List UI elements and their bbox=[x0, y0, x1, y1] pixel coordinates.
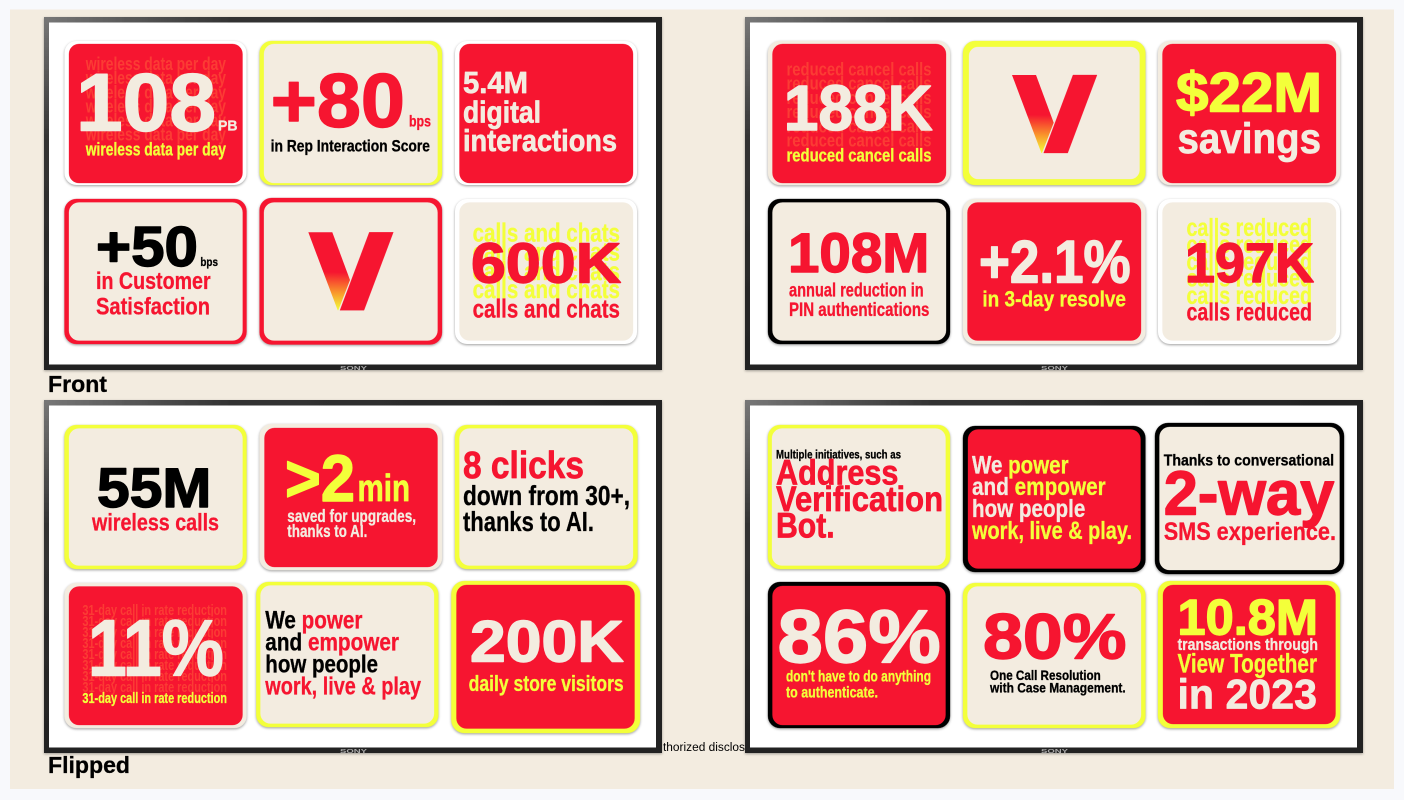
text block: how people bbox=[265, 650, 378, 678]
panel: front, left screen bbox=[44, 17, 662, 372]
card: 600K calls and chats bbox=[455, 199, 637, 344]
card: $22M savings bbox=[1158, 41, 1340, 185]
caption: PIN authentications bbox=[789, 300, 929, 321]
stat: 108M bbox=[788, 221, 929, 284]
card: >2 min saved for upgrades bbox=[260, 424, 442, 570]
stat: +80 bbox=[271, 59, 405, 144]
ghost repeated caption: 31-day call in rate reduction bbox=[82, 680, 227, 696]
caption: daily store visitors bbox=[469, 671, 624, 696]
ghost repeated caption bbox=[82, 603, 227, 696]
caption: to authenticate. bbox=[786, 684, 878, 701]
headline: Bot. bbox=[776, 507, 835, 546]
card: 5.4M digital interactions bbox=[455, 41, 637, 185]
ghost repeated caption: 31-day call in rate reduction bbox=[82, 625, 227, 641]
screen frame: SONY bbox=[1041, 366, 1069, 372]
caption: wireless calls bbox=[91, 510, 219, 537]
ghost repeated caption: wireless data per day bbox=[85, 111, 226, 131]
text block: work, live & play. bbox=[971, 517, 1132, 545]
text block: We power bbox=[972, 451, 1069, 479]
text block: and empower bbox=[972, 473, 1106, 501]
card: +2.1% in 3-day resolve bbox=[963, 199, 1145, 344]
caption bbox=[463, 480, 630, 537]
unit: PB bbox=[218, 118, 238, 135]
text: transactions through: transactions through bbox=[1178, 635, 1318, 654]
stat: 188K bbox=[784, 72, 933, 144]
caption: in 3-day resolve bbox=[982, 287, 1126, 312]
caption bbox=[96, 268, 211, 321]
unit: bps bbox=[409, 114, 431, 131]
ghost repeated caption: wireless data per day bbox=[85, 68, 226, 88]
stat: 2-way bbox=[1164, 459, 1335, 528]
text block: We power bbox=[265, 606, 363, 634]
ghost repeated caption: reduced cancel calls bbox=[786, 117, 932, 137]
headline: Address bbox=[776, 453, 898, 492]
ghost repeated caption: wireless data per day bbox=[85, 54, 226, 74]
ghost repeated caption: 31-day call in rate reduction bbox=[82, 658, 227, 674]
caption: reduced cancel calls bbox=[786, 145, 932, 165]
stat: 108 bbox=[76, 58, 216, 149]
card: 197K calls reduced bbox=[1158, 199, 1340, 344]
panel: front, right screen bbox=[745, 17, 1363, 372]
screen frame: SONY bbox=[340, 366, 368, 372]
card: We power, red on black bbox=[963, 426, 1145, 572]
ghost repeated caption: calls reduced bbox=[1186, 282, 1312, 310]
ghost repeated caption: calls and chats bbox=[473, 237, 620, 267]
stat: 86% bbox=[778, 594, 941, 678]
ghost repeated caption: reduced cancel calls bbox=[786, 59, 932, 79]
card: V logo, red border bbox=[260, 198, 442, 344]
caption: calls and chats bbox=[473, 293, 620, 323]
text: in 2023: in 2023 bbox=[1178, 670, 1317, 717]
ghost repeated caption: wireless data per day bbox=[85, 97, 226, 117]
card: 80% One Call Resolution bbox=[963, 583, 1145, 728]
caption: wireless data per day bbox=[85, 139, 226, 159]
caption: savings bbox=[1178, 115, 1321, 163]
caption: in Rep Interaction Score bbox=[271, 138, 430, 156]
card: 11% call in rate reduction bbox=[64, 583, 246, 728]
icon: V logo bbox=[1012, 75, 1097, 153]
stat: >2 bbox=[285, 441, 355, 515]
ghost repeated caption: wireless data per day bbox=[85, 125, 226, 145]
card: 200K daily store visitors bbox=[451, 581, 640, 733]
card: We power and empower bbox=[256, 582, 438, 727]
ghost repeated caption: calls and chats bbox=[473, 218, 620, 248]
text block: interactions bbox=[463, 123, 617, 158]
text block bbox=[265, 606, 421, 700]
ghost repeated caption bbox=[473, 218, 620, 304]
text block bbox=[463, 65, 617, 158]
text block: how people bbox=[972, 495, 1085, 523]
card: 8 clicks bbox=[455, 425, 638, 569]
ghost repeated caption: calls and chats bbox=[473, 274, 620, 304]
text block bbox=[971, 451, 1132, 545]
caption: calls reduced bbox=[1186, 299, 1312, 327]
panel: flipped, right screen bbox=[745, 400, 1363, 755]
panel: flipped, left screen bbox=[44, 400, 662, 755]
screen frame: SONY bbox=[340, 749, 368, 755]
ghost repeated caption: reduced cancel calls bbox=[786, 131, 932, 151]
unit: bps bbox=[200, 255, 218, 269]
card: 10.8M View Together bbox=[1158, 581, 1340, 728]
intro line: Thanks to conversational bbox=[1164, 453, 1334, 470]
ghost repeated caption: wireless data per day bbox=[85, 83, 226, 103]
ghost repeated caption: reduced cancel calls bbox=[786, 73, 932, 93]
caption: annual reduction in bbox=[789, 281, 924, 302]
text block: 5.4M bbox=[463, 65, 528, 100]
label: Flipped: Flipped bbox=[48, 752, 130, 778]
footer text fragment: thorized disclos bbox=[663, 742, 745, 754]
card: 188K reduced cancel calls bbox=[768, 41, 950, 185]
stat: +50 bbox=[96, 215, 198, 279]
ghost repeated caption: reduced cancel calls bbox=[786, 88, 932, 108]
ghost repeated caption: 31-day call in rate reduction bbox=[82, 669, 227, 685]
screen frame bbox=[44, 17, 662, 372]
ghost repeated caption: 31-day call in rate reduction bbox=[82, 614, 227, 630]
screen frame bbox=[745, 400, 1363, 755]
ghost repeated caption: 31-day call in rate reduction bbox=[82, 647, 227, 663]
caption bbox=[287, 506, 416, 541]
ghost repeated caption: calls reduced bbox=[1186, 231, 1312, 259]
ghost repeated caption bbox=[1186, 214, 1312, 310]
label: Front: Front bbox=[48, 371, 107, 397]
headline: Verification bbox=[776, 480, 943, 519]
caption bbox=[989, 667, 1126, 696]
stat: 8 clicks bbox=[463, 445, 584, 487]
screen frame bbox=[44, 400, 662, 755]
card: 108M annual reduction bbox=[768, 199, 950, 344]
stat: 55M bbox=[97, 456, 211, 519]
card: Address Verification Bot bbox=[768, 425, 950, 569]
caption: with Case Management. bbox=[989, 680, 1126, 696]
ghost repeated caption: calls and chats bbox=[473, 256, 620, 286]
unit: min bbox=[358, 468, 410, 510]
card: 108 PB wireless data per day bbox=[64, 41, 246, 185]
caption: 31-day call in rate reduction bbox=[82, 691, 227, 707]
text block: work, live & play bbox=[265, 672, 421, 700]
ghost repeated caption: calls reduced bbox=[1186, 248, 1312, 276]
ghost repeated caption: 31-day call in rate reduction bbox=[82, 603, 227, 619]
stat: +2.1% bbox=[979, 229, 1131, 296]
stat: 200K bbox=[470, 610, 624, 675]
card: +50 bps bbox=[64, 199, 246, 344]
caption bbox=[786, 669, 931, 701]
ghost repeated caption bbox=[85, 54, 226, 145]
caption: in Customer bbox=[96, 268, 211, 295]
caption: thanks to AI. bbox=[287, 521, 367, 541]
caption: Satisfaction bbox=[96, 294, 210, 321]
stat: 600K bbox=[471, 232, 621, 296]
ghost repeated caption: calls reduced bbox=[1186, 265, 1312, 293]
caption: One Call Resolution bbox=[990, 667, 1101, 683]
screen frame bbox=[745, 17, 1363, 372]
caption: don't have to do anything bbox=[786, 669, 931, 686]
stat: 80% bbox=[983, 600, 1126, 672]
card: +80 bps bbox=[260, 41, 442, 185]
icon: V logo bbox=[308, 232, 393, 310]
text: View Together: View Together bbox=[1178, 648, 1317, 678]
text block: and empower bbox=[265, 628, 399, 656]
screen frame: SONY bbox=[1041, 749, 1069, 755]
card: 2-way SMS experience bbox=[1155, 423, 1344, 574]
ghost repeated caption: calls reduced bbox=[1186, 214, 1312, 242]
card: 55M wireless calls bbox=[64, 425, 246, 569]
stat: 10.8M bbox=[1178, 589, 1318, 645]
stat: $22M bbox=[1176, 61, 1322, 124]
caption: down from 30+, bbox=[463, 480, 630, 511]
caption bbox=[789, 281, 929, 321]
text block: digital bbox=[463, 95, 541, 130]
intro line: Multiple initiatives, such as bbox=[776, 447, 901, 461]
card: 86% don't have to authenticate bbox=[768, 582, 950, 728]
headline bbox=[776, 453, 943, 546]
stat: 197K bbox=[1185, 231, 1314, 294]
caption: saved for upgrades, bbox=[287, 506, 416, 526]
ghost repeated caption: 31-day call in rate reduction bbox=[82, 636, 227, 652]
caption: thanks to AI. bbox=[463, 506, 594, 537]
ghost repeated caption bbox=[786, 59, 932, 151]
stat: 11% bbox=[88, 604, 224, 693]
ghost repeated caption: reduced cancel calls bbox=[786, 102, 932, 122]
card: V logo, yellow border bbox=[963, 41, 1145, 185]
caption: SMS experience. bbox=[1164, 518, 1336, 546]
